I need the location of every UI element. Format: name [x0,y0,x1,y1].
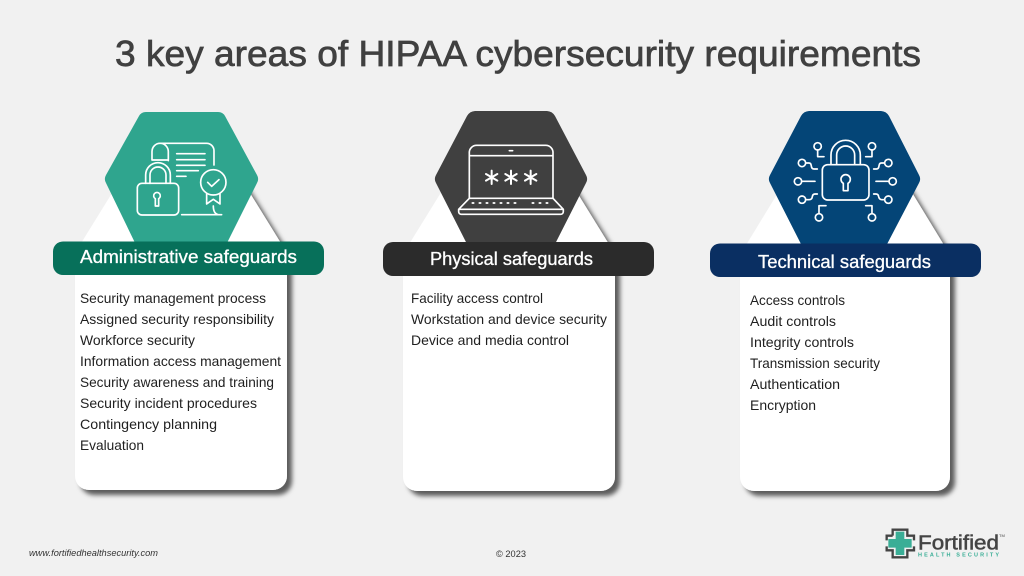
hexagon: administrative [105,112,258,247]
banner: administrative safeguards [53,242,324,275]
wordmark: Fortified [918,532,999,554]
list: technical items: Audit controls [750,313,836,329]
list: technical items: Access controls [750,292,845,308]
list: technical items [750,292,880,413]
hexagon: physical [435,111,587,248]
footer: website: www.fortifiedhealthsecurity.com [29,548,158,559]
list: administrative items: Contingency planning [80,416,217,432]
panel: physical safeguards [383,111,654,491]
title: 3 key areas of HIPAA cybersecurity requirements [115,33,921,74]
trademark: TM [999,533,1005,538]
banner: administrative safeguards: Administrative safeguards [80,247,297,267]
list: administrative items: Assigned security responsibility [80,311,274,327]
banner: technical safeguards: Technical safeguards [758,252,931,272]
list: physical items [411,290,607,348]
icon: laptop with password [459,145,563,214]
logo: Fortified Health Security [887,530,1005,558]
banner: physical safeguards [383,242,654,276]
icon: lock and certificate [137,143,226,215]
icon: medical cross [887,530,914,557]
list: administrative items: Security management process [80,290,266,306]
card: administrative [75,130,287,490]
list: administrative items [80,290,281,453]
banner: technical safeguards [710,244,981,277]
list: technical items: Integrity controls [750,334,854,350]
card: physical [403,131,615,491]
panel: technical safeguards [710,111,981,491]
card: technical [740,132,950,491]
footer: copyright: © 2023 [496,549,526,560]
list: physical items: Facility access control [411,290,543,306]
list: physical items: Workstation and device security [411,311,607,327]
list: administrative items: Evaluation [80,437,144,453]
icon: padlock with circuit nodes [794,140,896,221]
list: administrative items: Information access management [80,353,281,369]
tagline: HEALTH SECURITY [918,552,999,558]
list: administrative items: Security incident procedures [80,395,257,411]
list: administrative items: Security awareness and training [80,374,274,390]
list: administrative items: Workforce security [80,332,195,348]
list: technical items: Authentication [750,376,840,392]
list: technical items: Transmission security [750,355,880,371]
panel: administrative safeguards [53,112,324,490]
list: technical items: Encryption [750,397,816,413]
banner: physical safeguards: Physical safeguards [430,249,593,269]
hexagon: technical [769,111,920,248]
list: physical items: Device and media control [411,332,569,348]
